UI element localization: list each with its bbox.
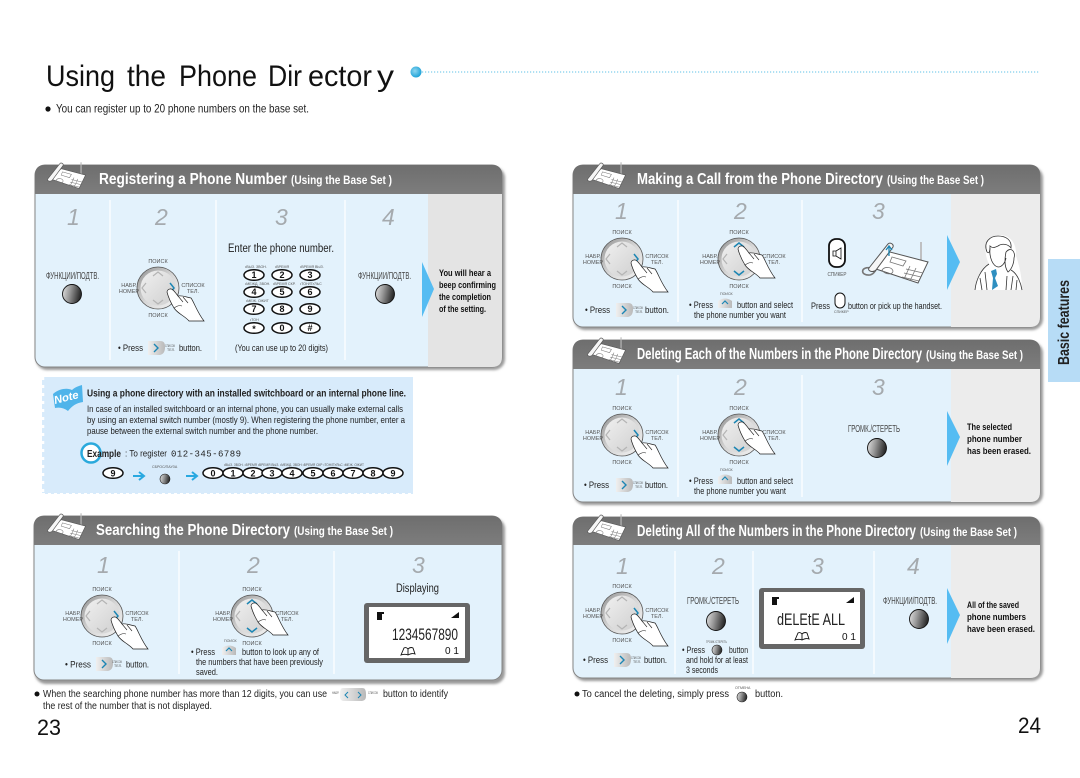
side tab: Basic features: Basic features: [1056, 280, 1073, 365]
step 3: instruction: СПИКЕР: [834, 310, 849, 314]
step 1: instruction: [65, 657, 149, 671]
footnote left: НАБР.: [332, 691, 339, 695]
note body: pause between the external switch number and the phone number.: [87, 426, 318, 437]
step 1: instruction: СПИСОК: [112, 660, 123, 664]
title: Using: [46, 60, 115, 93]
step 3: keypad: •ТОН: [250, 318, 259, 322]
step 3: keypad: 2: [279, 270, 285, 280]
step 1: instruction: • Press: [585, 305, 610, 316]
header phone icon: [584, 337, 626, 364]
example key sequence: СБРОС/ПАУЗА: [152, 465, 178, 469]
step 1: instruction: button.: [644, 655, 667, 666]
step numbers: 2: [246, 552, 260, 578]
arrow: [422, 262, 434, 317]
step 1: dial: НОМЕР: [583, 436, 603, 442]
step 2: instruction: [682, 640, 748, 676]
step 2: dial: ТЕЛ.: [768, 260, 781, 266]
heading: Making a Call from the Phone Directory: [637, 171, 883, 188]
step 2: dial: ПОИСК: [729, 230, 749, 236]
step 3: LCD display: 1234567890: [392, 625, 458, 644]
note body: In case of an installed switchboard or an internal phone, you can usually make external calls: [87, 404, 403, 415]
step 2: instruction: ГРОМК./СТЕРЕТЬ: [706, 640, 727, 644]
step 1: dial: [583, 584, 669, 646]
icon: note book: [53, 385, 83, 411]
step 2: dial: СПИСОК: [762, 254, 786, 260]
step 2: instruction: the numbers that have been previously: [196, 657, 323, 668]
step 2: instruction: • Press: [118, 343, 143, 354]
example key sequence: 2: [250, 468, 256, 478]
step 1: dial: ПОИСК: [612, 230, 632, 236]
step 3: keypad: 7: [251, 304, 257, 314]
intro bullet text: You can register up to 20 phone numbers on the base set.: [56, 102, 309, 116]
step 2: dial: НАБР.: [215, 611, 231, 617]
result text: All of the saved: [967, 600, 1019, 611]
example key sequence: 9: [110, 468, 116, 478]
step 2: erase button: [687, 596, 739, 630]
step 3: LCD display: [364, 603, 470, 663]
title marker and dotted rule: [410, 66, 1040, 78]
result text: beep confirming: [439, 280, 496, 291]
panel: Registering a Phone Number: [35, 162, 505, 370]
step 1: instruction: СПИСОК: [633, 481, 644, 485]
arrow: [947, 411, 960, 466]
step 1: dial: ПОИСК: [92, 641, 112, 647]
step 1: dial: ПОИСК: [612, 284, 632, 290]
arrow: [947, 235, 960, 290]
result text: phone number: [967, 434, 1022, 445]
step 2: dial: СПИСОК: [275, 611, 299, 617]
step 3: keypad: 3: [307, 270, 313, 280]
step 1: instruction: • Press: [65, 660, 91, 670]
step 2: dial: ТЕЛ.: [281, 617, 294, 623]
step 1: instruction: СПИСОК: [633, 306, 644, 310]
step 2: dial: [119, 259, 205, 321]
step 2: instruction: СПИСОК: [165, 344, 176, 348]
step 3: phone with handset: [863, 242, 928, 283]
step 2: dial: [700, 230, 786, 290]
title: ector: [308, 60, 372, 93]
footnote left: СПИСОК: [368, 691, 379, 695]
step 1: dial: НАБР.: [585, 254, 601, 260]
example key sequence: 7: [350, 468, 356, 478]
step 2: dial: НАБР.: [702, 430, 718, 436]
result text: of the setting.: [439, 304, 486, 315]
panel: Note: [42, 377, 413, 494]
result text: [967, 600, 1035, 635]
step 3: keypad: 5: [279, 287, 285, 297]
step 3: LCD display: [759, 588, 865, 649]
step 1: instruction: • Press: [584, 480, 609, 491]
step 1: dial: ПОИСК: [612, 584, 632, 590]
step 2: dial: [700, 406, 786, 466]
step 2: dial: НАБР.: [121, 283, 137, 289]
title: Dir: [268, 60, 302, 93]
example label: Example: [87, 448, 121, 460]
step 1: dial: [583, 230, 669, 292]
note body: by using an external switch number (mostly 9). When registering the phone number, enter a: [87, 415, 406, 426]
step 3: keypad: #: [307, 323, 313, 333]
step 2: instruction: button and select: [737, 300, 793, 311]
step 3: keypad: *: [252, 324, 256, 334]
result text: You will hear a: [439, 268, 492, 279]
step 3: instruction: [811, 293, 942, 314]
step 4: function button: [358, 271, 411, 304]
step 2: dial: ПОИСК: [148, 259, 168, 265]
step 1: dial: ТЕЛ.: [131, 617, 144, 623]
footnote left: [34, 688, 448, 712]
step numbers: 2: [154, 204, 168, 230]
step 2: dial: ПОИСК: [729, 284, 749, 290]
title: y: [377, 60, 394, 93]
step numbers: 3: [872, 374, 885, 400]
step 2: instruction: [689, 292, 793, 321]
example key sequence: 6: [330, 468, 336, 478]
example key sequence: 8: [370, 468, 376, 478]
step 1: instruction: button.: [645, 480, 668, 491]
step numbers: 3: [872, 198, 885, 224]
step 1: instruction: ТЕЛ.: [635, 485, 643, 489]
example key sequence: 9: [390, 468, 396, 478]
step 3: speaker button: [828, 239, 847, 278]
step numbers: 1: [616, 553, 629, 579]
panel: Deleting Each of the Numbers: [573, 337, 1043, 505]
step 1: dial: СПИСОК: [645, 608, 669, 614]
step 3: label: Displaying: [396, 583, 439, 595]
step numbers: 4: [382, 204, 395, 230]
step 3: keypad: •ВРЕМЯ СКР.: [273, 282, 296, 286]
title: Phone: [179, 60, 257, 93]
step 3: LCD display: 0 1: [842, 632, 856, 643]
footnote left: the rest of the number that is not displayed.: [43, 701, 212, 712]
step 1: instruction: ТЕЛ.: [635, 310, 643, 314]
note body: [87, 404, 406, 437]
result text: the completion: [439, 292, 491, 303]
step numbers: [97, 552, 425, 578]
step numbers: [67, 204, 395, 230]
example key sequence: 3: [269, 468, 275, 478]
step 2: instruction: ПОИСК: [224, 639, 238, 643]
step 3: keypad: •МЕЖД. ЗВОН.: [245, 282, 270, 286]
footnote right: [574, 686, 783, 702]
step 2: dial: ТЕЛ.: [187, 289, 200, 295]
step 2: instruction: button: [729, 645, 748, 656]
step 3: keypad: •ТОН/ПУЛЬС: [300, 282, 322, 286]
heading: Deleting All of the Numbers in the Phone Directory: [637, 523, 916, 540]
step 2: instruction: ТЕЛ.: [167, 348, 175, 352]
step 2: instruction: • Press: [191, 647, 215, 658]
step 2: instruction: [689, 468, 793, 497]
step 1: instruction: button.: [126, 660, 149, 670]
step 3: erase button: ГРОМК./СТЕРЕТЬ: [848, 424, 900, 435]
step 1: dial: ПОИСК: [612, 406, 632, 412]
panel: Making a Call from the Phone Directory: [573, 162, 1043, 330]
footnote left: button to identify: [383, 689, 448, 700]
step 2: dial: ПОИСК: [242, 587, 262, 593]
heading: (Using the Base Set ): [887, 173, 984, 187]
step 1: instruction: button.: [645, 305, 669, 316]
result text: phone numbers: [967, 612, 1026, 623]
step 1: dial: СПИСОК: [125, 611, 149, 617]
step numbers: 2: [733, 374, 747, 400]
step 2: dial: СПИСОК: [181, 283, 205, 289]
result text: have been erased.: [967, 624, 1035, 635]
result text: [439, 268, 496, 315]
step 2: instruction: 3 seconds: [686, 665, 718, 676]
step 3: keypad: 0: [279, 323, 285, 333]
result text: The selected: [967, 422, 1012, 433]
step 1: dial: ПОИСК: [612, 460, 632, 466]
step 3: keypad: •ВРЕМЯ: [275, 265, 289, 269]
example label: [82, 444, 241, 462]
result text: [967, 422, 1031, 457]
step 3: instruction: Enter the phone number.: [228, 243, 334, 255]
step 2: dial: ПОИСК: [242, 641, 262, 647]
step 1: instruction: ТЕЛ.: [114, 664, 122, 668]
title: [46, 60, 394, 93]
example key sequence: [103, 463, 403, 484]
step 3: keypad: •ВРЕМЯ ВЫЗ.: [300, 265, 324, 269]
step 3: keypad: [244, 265, 324, 334]
step 2: dial: ТЕЛ.: [768, 436, 781, 442]
example label: : To register: [125, 448, 167, 460]
step 3: instruction: button or pick up the handset.: [848, 301, 942, 312]
heading: Deleting Each of the Numbers in the Phone Directory: [637, 346, 922, 363]
heading: (Using the Base Set ): [926, 348, 1023, 362]
header phone icon: [44, 162, 86, 189]
step numbers: [615, 198, 885, 224]
heading: (Using the Base Set ): [920, 525, 1017, 539]
footnote left: When the searching phone number has more than 12 digits, you can use: [43, 689, 327, 700]
example key sequence: 4: [289, 468, 295, 478]
step 2: instruction: • Press: [689, 476, 713, 487]
step 1: dial: [63, 587, 149, 649]
step numbers: [616, 553, 920, 579]
step 3: keypad: 9: [307, 304, 313, 314]
step 2: instruction: button to look up any of: [242, 647, 319, 658]
step 2: instruction: saved.: [196, 667, 218, 678]
step 2: dial: ПОИСК: [729, 406, 749, 412]
step 2: instruction: and hold for at least: [686, 655, 748, 666]
step 2: instruction: • Press: [689, 300, 713, 311]
step numbers: 1: [67, 204, 80, 230]
step 2: instruction: button.: [179, 343, 202, 354]
step 1: dial: ПОИСК: [92, 587, 112, 593]
panel: Searching the Phone Directory: [34, 513, 505, 684]
step 1: instruction: • Press: [583, 655, 608, 666]
step 2: dial: НОМЕР: [700, 260, 720, 266]
panel: Deleting All of the Numbers: [573, 514, 1043, 681]
page number 23: 23: [37, 715, 61, 740]
step numbers: 1: [97, 552, 110, 578]
step 2: erase button: ГРОМК./СТЕРЕТЬ: [687, 596, 739, 607]
step 1: dial: СПИСОК: [645, 430, 669, 436]
step 2: dial: [213, 587, 299, 647]
title: the: [127, 60, 166, 93]
step numbers: 3: [275, 204, 288, 230]
step 1: dial: ТЕЛ.: [651, 436, 664, 442]
step 1: dial: НОМЕР: [63, 617, 83, 623]
example key sequence: 5: [310, 468, 316, 478]
example key sequence: •ВЫЗ. ЗВОН. •ВРЕМЯ •ВРЕМЯ ВЫЗ. •МЕЖД. ЗВОН •ВРЕМЯ СКР •ТОН/ПУЛЬС •МЕЖ. ОЖИТ: [224, 463, 365, 467]
step 3: keypad: •МЕЖ. ОЖИТ: [246, 299, 270, 303]
step 2: instruction: button and select: [737, 476, 793, 487]
step 2: instruction: [191, 639, 323, 678]
step 2: dial: ПОИСК: [148, 313, 168, 319]
step 1: dial: ТЕЛ.: [651, 614, 664, 620]
step numbers: 3: [811, 553, 824, 579]
step 2: instruction: [118, 341, 202, 355]
step 3: keypad: 6: [307, 287, 313, 297]
header phone icon: [584, 162, 626, 189]
footnote right: button.: [755, 689, 783, 700]
step 2: dial: НОМЕР: [700, 436, 720, 442]
illustration: man on phone: [975, 235, 1022, 290]
step numbers: [615, 374, 885, 400]
side tab: Basic features: [1048, 259, 1080, 382]
example key sequence: 1: [230, 468, 236, 478]
step numbers: 3: [412, 552, 425, 578]
step 3: keypad: •ВЫЗ. ЗВОН.: [245, 265, 267, 269]
step 3: LCD display: 0 1: [445, 646, 459, 657]
heading: (Using the Base Set ): [294, 524, 393, 538]
example label: 012-345-6789: [171, 450, 241, 460]
icon: note book: Note: [53, 389, 80, 407]
step 1: dial: СПИСОК: [645, 254, 669, 260]
heading: Searching the Phone Directory: [96, 522, 290, 539]
step 4: function button: ФУНКЦИИ/ПОДТВ.: [883, 596, 937, 607]
step 2: instruction: the phone number you want: [694, 486, 786, 497]
header phone icon: [44, 513, 86, 540]
step 2: dial: НАБР.: [702, 254, 718, 260]
step 1: dial: [583, 406, 669, 468]
heading: (Using the Base Set ): [291, 173, 392, 187]
step numbers: 4: [907, 553, 920, 579]
step 3: erase button: [848, 424, 900, 458]
step 2: instruction: the phone number you want: [694, 310, 786, 321]
step numbers: 2: [711, 553, 725, 579]
step 2: instruction: ПОИСК: [720, 292, 734, 296]
step 1: instruction: ТЕЛ.: [633, 660, 641, 664]
step 2: instruction: • Press: [682, 645, 705, 656]
step 3: note: (You can use up to 20 digits): [235, 343, 328, 354]
step 1: instruction: СПИСОК: [631, 656, 642, 660]
step 1: dial: НАБР.: [585, 608, 601, 614]
example key sequence: 0: [210, 468, 216, 478]
page number 24: 24: [1018, 713, 1041, 738]
step 3: instruction: Press: [811, 301, 830, 312]
step 1: dial: НАБР.: [65, 611, 81, 617]
step 2: dial: ПОИСК: [729, 460, 749, 466]
step 1: dial: НОМЕР: [583, 260, 603, 266]
step 2: dial: НОМЕР: [119, 289, 139, 295]
arrow: [947, 588, 960, 644]
step 1: dial: НОМЕР: [583, 614, 603, 620]
step 3: speaker button: СПИКЕР: [828, 272, 847, 278]
header phone icon: [584, 514, 626, 541]
step 2: instruction: ПОИСК: [720, 468, 734, 472]
note heading: Using a phone directory with an installed switchboard or an internal phone line.: [87, 388, 406, 400]
result text: has been erased.: [967, 446, 1031, 457]
step numbers: 2: [733, 198, 747, 224]
step numbers: 1: [615, 198, 628, 224]
footnote right: To cancel the deleting, simply press: [582, 689, 729, 700]
step 4: function button: ФУНКЦИИ/ПОДТВ.: [358, 271, 411, 282]
step 1: instruction: [584, 478, 668, 492]
step 1: dial: НАБР.: [585, 430, 601, 436]
step 1: dial: ТЕЛ.: [651, 260, 664, 266]
step 3: keypad: 1: [251, 270, 257, 280]
step 2: dial: СПИСОК: [762, 430, 786, 436]
step 1: dial: ПОИСК: [612, 638, 632, 644]
step 1: function button: ФУНКЦИИ/ПОДТВ.: [46, 271, 99, 282]
footnote right: ОТМЕНА: [735, 686, 751, 690]
step 3: keypad: 8: [279, 304, 285, 314]
step 3: keypad: 4: [251, 287, 257, 297]
step 4: function button: [883, 596, 937, 628]
step 1: instruction: [585, 303, 669, 317]
step 3: LCD display: dELEtE ALL: [777, 610, 845, 629]
step 1: function button: [46, 271, 99, 304]
step 2: dial: НОМЕР: [213, 617, 233, 623]
step 1: instruction: [583, 653, 667, 667]
step numbers: 1: [615, 374, 628, 400]
heading: Registering a Phone Number: [99, 171, 287, 188]
